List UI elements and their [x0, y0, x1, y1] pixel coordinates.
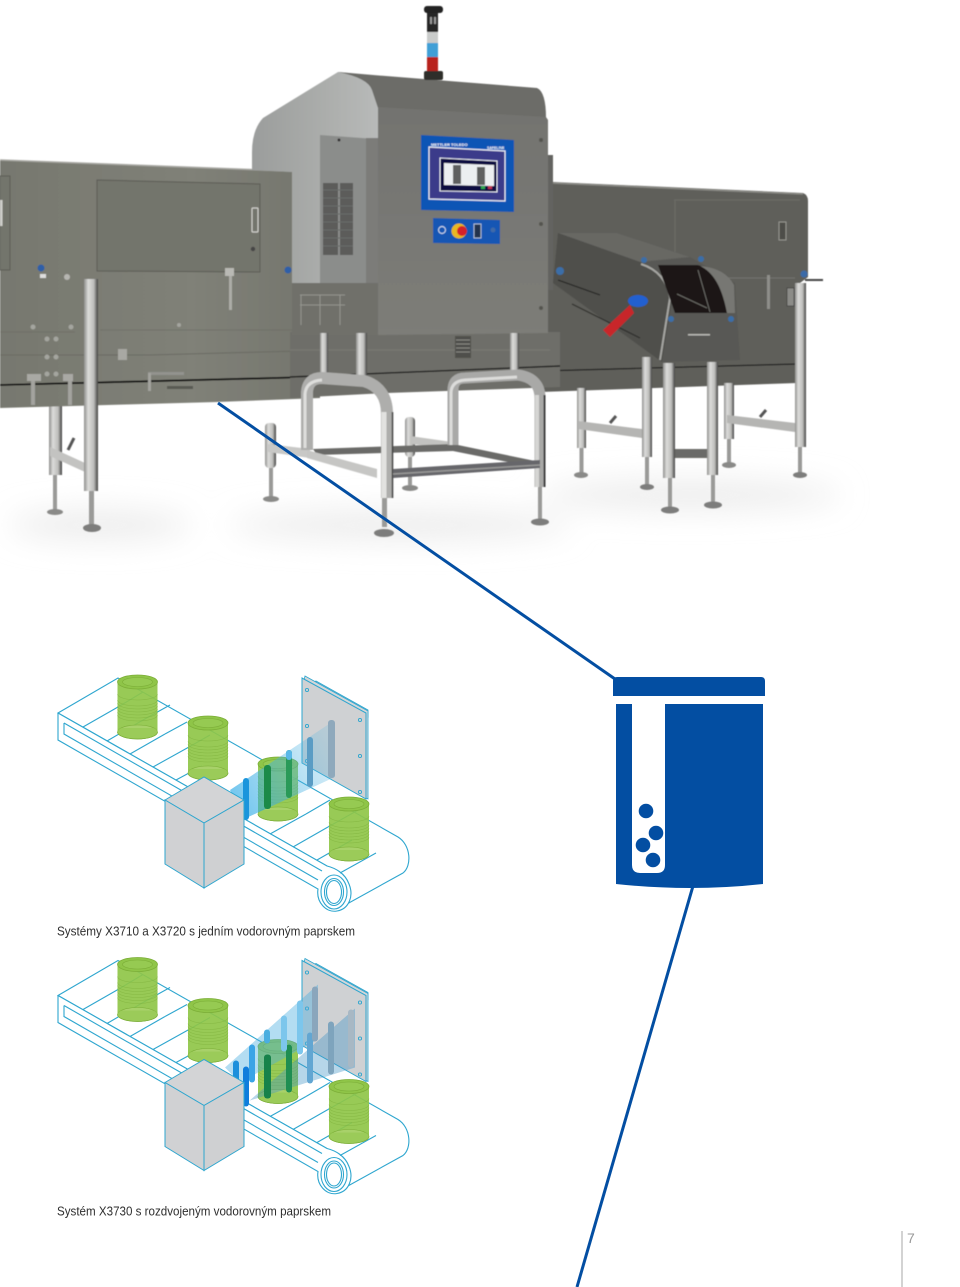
rear legs of left conveyor — [47, 405, 85, 515]
conveyor belt — [58, 678, 409, 911]
rear legs of right conveyor — [574, 383, 795, 478]
diagram: single horizontal beam — [58, 675, 409, 911]
photo: X-ray inspection machine — [0, 6, 823, 537]
x-ray source box — [165, 1060, 244, 1170]
right conveyor body — [540, 182, 823, 392]
x-ray source box — [165, 777, 244, 888]
rear support frame — [263, 375, 549, 526]
conveyor band under cabinet — [290, 332, 560, 398]
front legs of right conveyor — [640, 283, 807, 514]
cabinet legs — [320, 333, 519, 381]
vent panel — [320, 135, 378, 283]
touchscreen — [421, 135, 514, 212]
page number: 7 — [907, 1230, 915, 1246]
x-ray split beams — [225, 984, 355, 1106]
caption: single beam: Systémy X3710 a X3720 s jedním vodorovným paprskem — [57, 924, 355, 938]
conveyor belt — [58, 960, 409, 1194]
signal beacon — [424, 6, 443, 80]
touchscreen: METTLER TOLEDO — [431, 142, 468, 147]
leader line: jar to bottom edge — [577, 886, 693, 1287]
touchscreen: SAFELINE — [487, 146, 505, 150]
front column of left conveyor — [83, 279, 101, 532]
leader line: machine to jar — [218, 403, 615, 679]
jar body — [616, 704, 763, 888]
floor shadow — [10, 481, 840, 539]
control panel — [433, 218, 500, 244]
jar lid — [613, 677, 765, 696]
X-ray cabinet — [252, 72, 553, 335]
detector plate — [302, 958, 368, 1082]
front support frame — [305, 378, 540, 537]
cans — [118, 958, 369, 1144]
detector plate — [302, 676, 368, 799]
particles — [636, 804, 663, 867]
cans — [118, 675, 369, 861]
icon: jar with contaminant particles — [613, 677, 765, 888]
left conveyor body — [0, 160, 320, 408]
x-ray beam — [230, 720, 335, 820]
caption: split beam: Systém X3730 s rozdvojeným vodorovným paprskem — [57, 1204, 331, 1218]
infeed chute — [553, 233, 740, 362]
page number — [902, 1230, 915, 1287]
diagram: split horizontal beam — [58, 958, 409, 1194]
